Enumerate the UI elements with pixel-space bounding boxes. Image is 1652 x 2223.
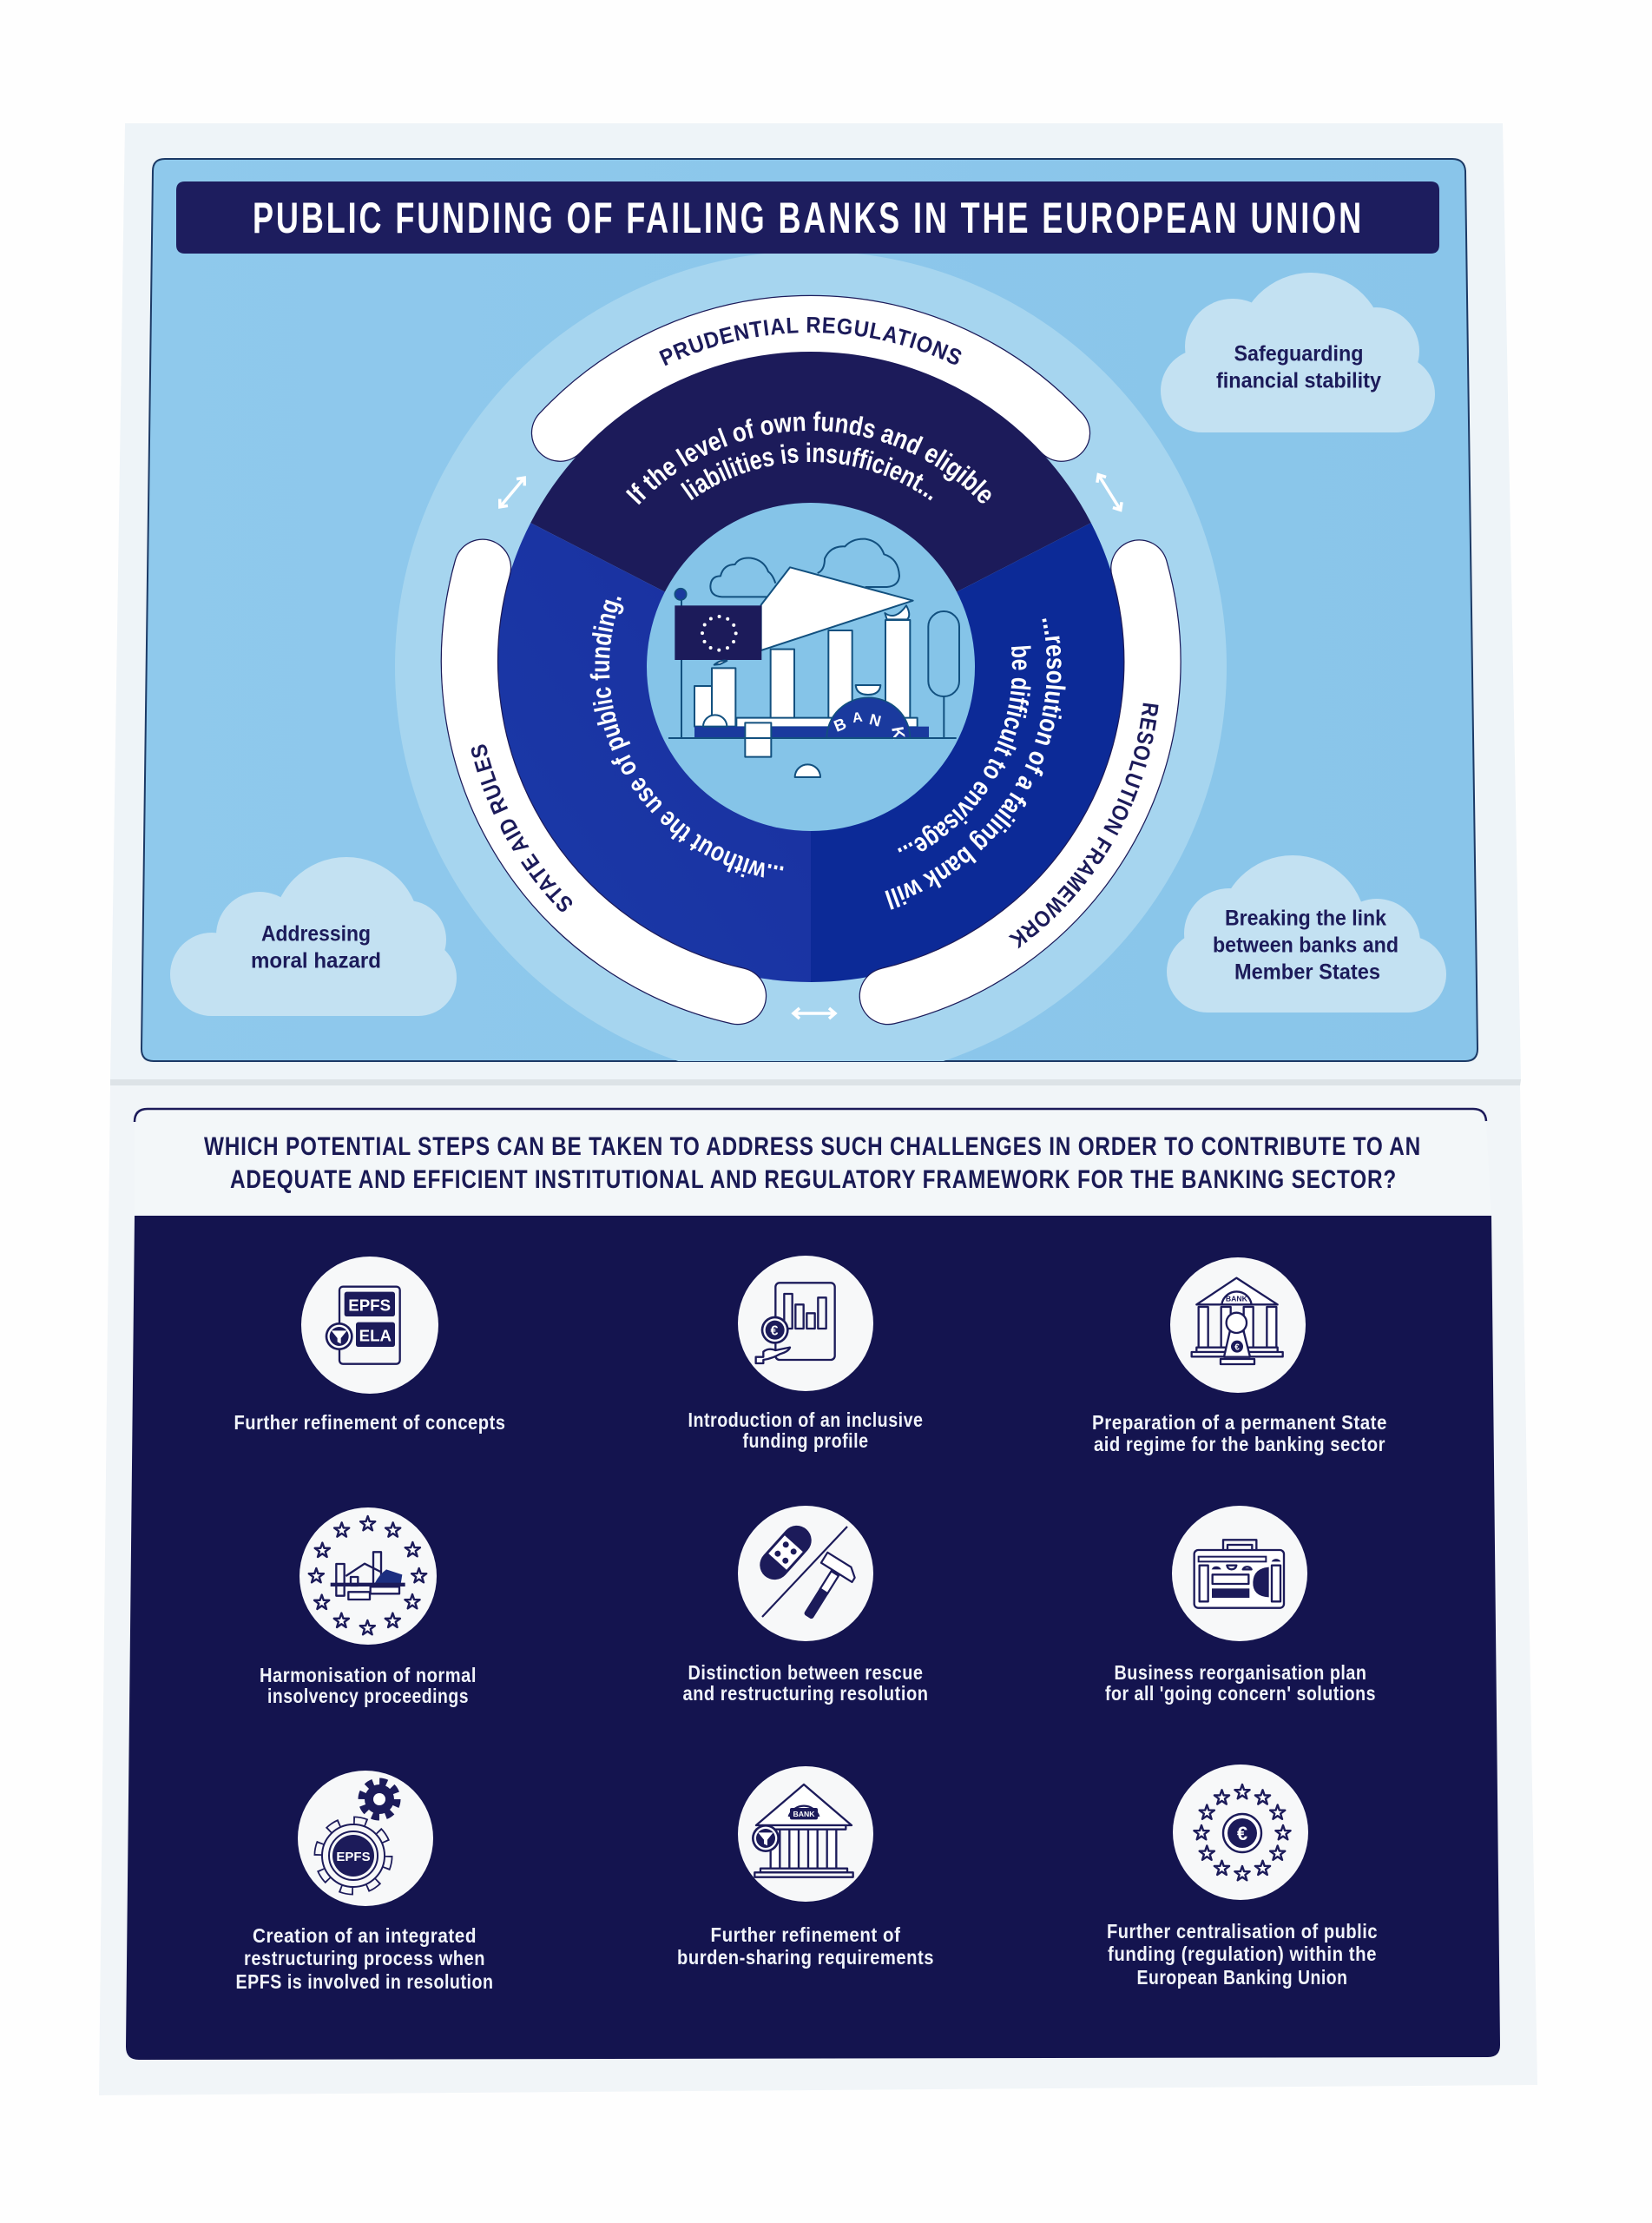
label: Business reorganisation plan — [1115, 1661, 1366, 1684]
step: business reorganisation plan: for all 'going concern' solutions — [1105, 1682, 1376, 1705]
icon: gears with EPFS — [319, 1783, 396, 1890]
cloud: safeguarding financial stability: Safeguarding — [1234, 342, 1363, 366]
band: prudential regulations — [560, 324, 1062, 433]
step: inclusive funding profile: funding profile — [743, 1429, 868, 1452]
quote: prudential line two: liabilities is insufficient... — [681, 443, 932, 500]
icon: EPFS ELA document — [326, 1287, 400, 1364]
column four — [885, 620, 910, 718]
EU flag — [675, 605, 761, 660]
arrow: top right — [1094, 472, 1125, 513]
column one — [712, 668, 735, 727]
paper sheet: fold shadow — [110, 1079, 1521, 1085]
step: burden-sharing requirements — [677, 1766, 934, 1969]
icon: bank with filter — [752, 1784, 853, 1877]
cloud: breaking the link — [1167, 855, 1446, 1013]
label: Creation of an integrated — [253, 1924, 477, 1947]
cloud: breaking the link: Member States — [1234, 960, 1380, 985]
cloud right — [818, 539, 899, 587]
base band — [694, 727, 929, 738]
title — [176, 181, 1439, 254]
flag pole — [679, 599, 684, 738]
step: rescue versus restructuring — [682, 1506, 929, 1705]
arrow: bottom — [793, 1008, 835, 1019]
circular diagram — [441, 295, 1181, 1025]
step: further centralisation: funding (regulation) within the — [1108, 1943, 1377, 1965]
bank bag — [826, 685, 910, 741]
step: permanent State aid regime — [1092, 1257, 1387, 1455]
half-circle bottom — [795, 764, 820, 777]
label: state aid rules: STATE AID RULES — [471, 744, 573, 912]
step — [736, 718, 918, 727]
pole ball — [675, 589, 687, 600]
quote: resolution line one: ...resolution of a failing bank will — [885, 618, 1066, 910]
bank bag: N — [867, 710, 883, 730]
icon: bandage and hammer — [754, 1520, 859, 1627]
icon: briefcase — [1195, 1540, 1284, 1608]
cloud: addressing moral hazard — [170, 857, 457, 1016]
icon: gears with EPFS: EPFS — [336, 1850, 371, 1864]
icon: chart with coin and hand: € — [771, 1324, 779, 1339]
cloud: breaking the link: Breaking the link — [1225, 907, 1386, 931]
ring segment: prudential wedge — [530, 352, 1091, 667]
cloud: safeguarding financial stability: financial stability — [1216, 368, 1381, 392]
capital left — [714, 661, 727, 665]
label: Preparation of a permanent State — [1092, 1411, 1387, 1434]
ring segment: state aid wedge — [496, 523, 811, 982]
cloud left — [710, 558, 775, 597]
step: burden-sharing requirements: burden-sharing requirements — [677, 1946, 934, 1969]
cloud: safeguarding financial stability — [1161, 273, 1435, 432]
step: further centralisation: European Banking Union — [1137, 1966, 1347, 1989]
band: state aid rules — [470, 568, 738, 996]
small column — [694, 686, 712, 727]
bank bag: B — [831, 714, 849, 736]
label: Further refinement of concepts — [234, 1411, 505, 1434]
centre circle — [647, 503, 975, 831]
step: harmonisation of insolvency — [260, 1507, 477, 1707]
label: Distinction between rescue — [688, 1661, 924, 1684]
column two — [771, 650, 794, 719]
paper sheet: lower — [99, 1085, 1537, 2095]
icon: chart with coin and hand — [756, 1283, 835, 1363]
label: Further refinement of — [710, 1923, 901, 1946]
label: prudential regulations: PRUDENTIAL REGULATIONS — [659, 317, 962, 366]
column three — [828, 630, 852, 719]
step: integrated restructuring process — [236, 1771, 493, 1993]
label: resolution framework: RESOLUTION FRAMEWORK — [1009, 703, 1158, 948]
paper sheet: upper — [110, 123, 1521, 1079]
step: further centralisation — [1107, 1765, 1378, 1989]
label: Further centralisation of public — [1107, 1920, 1378, 1943]
icon: bank with pawn: BANK — [1226, 1294, 1248, 1303]
step: further refinement of concepts — [234, 1257, 505, 1434]
half-circle left — [703, 715, 727, 727]
label: Harmonisation of normal — [260, 1664, 477, 1686]
step: harmonisation of insolvency: insolvency proceedings — [267, 1685, 469, 1707]
bank bag: A — [852, 710, 864, 726]
step: integrated restructuring process: EPFS is involved in resolution — [236, 1970, 493, 1993]
band: resolution framework — [888, 568, 1152, 996]
tree — [928, 611, 959, 738]
arrow: top left — [496, 474, 529, 511]
icon: star ring with mini bank — [309, 1516, 426, 1634]
ground line — [668, 736, 957, 741]
quote: prudential line one: If the level of own funds and eligible — [625, 412, 991, 505]
question line two: ADEQUATE AND EFFICIENT INSTITUTIONAL AND REGULATORY FRAMEWORK FOR THE BANKING SECTOR? — [230, 1165, 1397, 1194]
step: permanent State aid regime: aid regime for the banking sector — [1094, 1433, 1385, 1455]
cloud: breaking the link: between banks and — [1213, 933, 1399, 957]
pediment — [761, 567, 913, 650]
block — [745, 722, 771, 757]
cloud: addressing moral hazard: moral hazard — [251, 948, 381, 973]
icon: bank with pawn — [1192, 1278, 1283, 1364]
icon: bank building illustration — [668, 539, 959, 777]
icon: bank with pawn: € — [1234, 1342, 1240, 1352]
cloud: addressing moral hazard: Addressing — [261, 922, 371, 947]
icon: star ring with euro coin: € — [1237, 1823, 1247, 1844]
pale halo circle — [395, 251, 1227, 1083]
step: business reorganisation plan — [1105, 1506, 1376, 1705]
icon: EPFS ELA document: ELA — [359, 1326, 392, 1344]
quote: state aid: ...without the use of public funding. — [590, 597, 783, 878]
label: Introduction of an inclusive — [688, 1408, 924, 1431]
step: inclusive funding profile — [688, 1256, 924, 1452]
icon: EPFS ELA document: EPFS — [348, 1296, 391, 1314]
step: integrated restructuring process: restructuring process when — [244, 1947, 485, 1969]
panel: question header — [135, 1109, 1491, 1217]
panel: blue top diagram — [142, 159, 1478, 1083]
icon: bank with filter: BANK — [793, 1810, 815, 1818]
capital — [885, 605, 909, 619]
icon: star ring with euro coin — [1194, 1784, 1291, 1880]
bank bag: K — [887, 725, 907, 741]
top rule — [135, 1109, 1486, 1122]
ring segment: resolution wedge — [811, 523, 1126, 982]
step: rescue versus restructuring: and restructuring resolution — [682, 1682, 929, 1705]
quote: resolution line two: be difficult to envisage... — [898, 646, 1031, 853]
panel: navy steps background — [126, 1216, 1500, 2060]
